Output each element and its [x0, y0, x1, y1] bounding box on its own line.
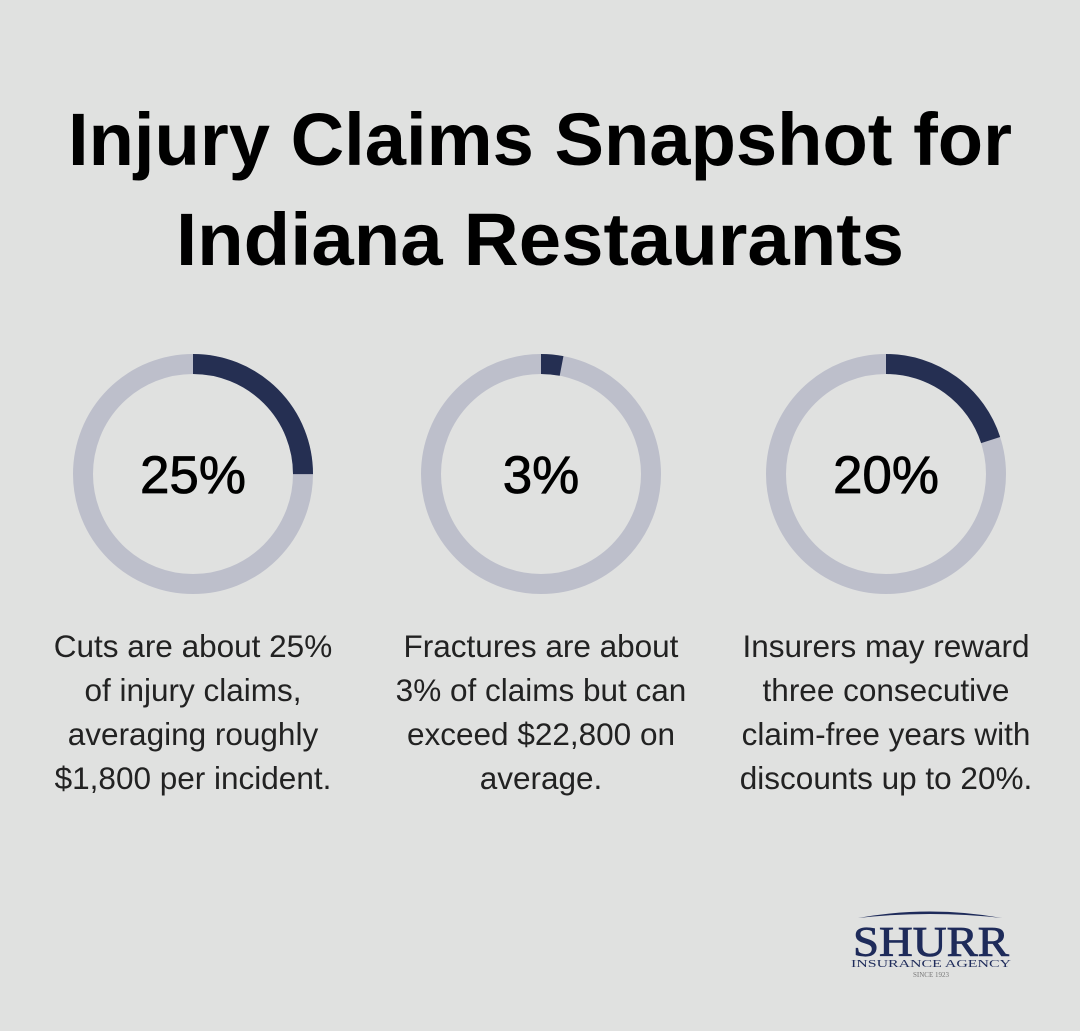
donut: 3%	[431, 364, 651, 584]
text: fractures: average.	[480, 760, 602, 796]
donut: 20%	[776, 364, 996, 584]
logo: SINCE 1923	[913, 971, 949, 979]
text: discounts: claim-free years with	[742, 716, 1030, 752]
logo: INSURANCE AGENCY	[851, 958, 1011, 970]
donut: 20%: 20%	[833, 446, 939, 505]
text: cuts: of injury claims,	[84, 672, 302, 708]
donut: 3%: 3%	[503, 446, 579, 505]
text: fractures	[396, 628, 686, 796]
donut: 25%: 25%	[140, 446, 246, 505]
text: fractures: Fractures are about	[404, 628, 679, 664]
text: discounts: Insurers may reward	[742, 628, 1030, 664]
logo: SHURR	[853, 920, 1009, 966]
text: discounts: three consecutive	[763, 672, 1009, 708]
title	[68, 98, 1012, 281]
text: cuts: averaging roughly	[68, 716, 318, 752]
text: cuts: Cuts are about 25%	[54, 628, 332, 664]
title: Indiana Restaurants	[176, 198, 904, 281]
text: cuts: $1,800 per incident.	[55, 760, 331, 796]
title: Injury Claims Snapshot for	[68, 98, 1012, 181]
text: cuts	[54, 628, 332, 796]
text: fractures: 3% of claims but can	[396, 672, 686, 708]
text: discounts: discounts up to 20%.	[740, 760, 1032, 796]
donut: 25%	[83, 364, 303, 584]
text: fractures: exceed $22,800 on	[407, 716, 675, 752]
logo	[851, 912, 1011, 979]
text: discounts	[740, 628, 1032, 796]
